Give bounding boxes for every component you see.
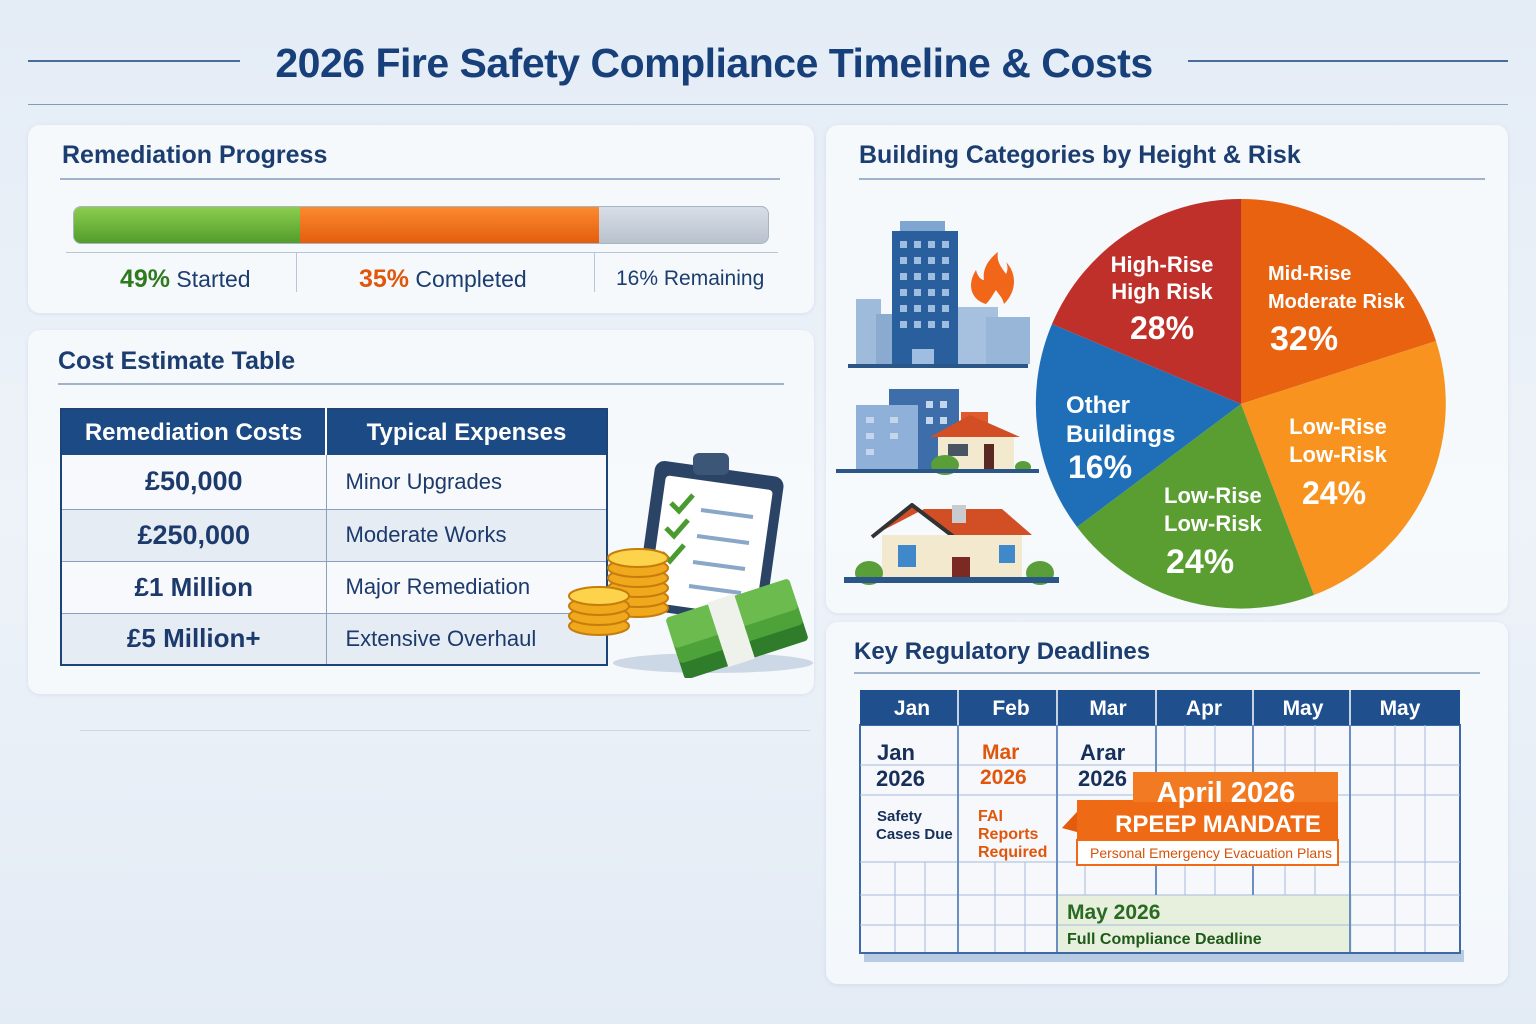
calendar: Reports bbox=[978, 826, 1039, 843]
callout: april 2026 rpeep mandate: April 2026 bbox=[1157, 777, 1295, 809]
icon: clipboard with coins and cash bbox=[568, 453, 813, 678]
calendar bbox=[859, 690, 1464, 962]
callout: april 2026 rpeep mandate bbox=[1062, 772, 1338, 865]
calendar: Safety bbox=[877, 808, 922, 825]
cost table: £5 Million+ bbox=[127, 623, 261, 653]
pie label: low-rise bottom: Low-Risk bbox=[1164, 511, 1263, 536]
calendar: Apr bbox=[1186, 697, 1222, 720]
pie label: mid-rise: 32% bbox=[1270, 320, 1338, 358]
heading: deadlines: Key Regulatory Deadlines bbox=[854, 638, 1150, 665]
calendar: Jan bbox=[877, 740, 915, 765]
calendar: May 2026 bbox=[1067, 901, 1160, 924]
cost table: Extensive Overhaul bbox=[346, 626, 536, 651]
calendar: 2026 bbox=[1078, 766, 1127, 791]
label: 35% completed: 35% Completed bbox=[359, 265, 527, 293]
pie label: mid-rise: Mid-Rise bbox=[1268, 263, 1351, 285]
calendar: Full Compliance Deadline bbox=[1067, 931, 1262, 948]
title: 2026 Fire Safety Compliance Timeline & Costs bbox=[275, 40, 1153, 86]
pie label: high-rise: High-Rise bbox=[1111, 252, 1213, 277]
calendar: Required bbox=[978, 844, 1047, 861]
pie label: high-rise: High Risk bbox=[1111, 279, 1213, 304]
icon: high-rise building with fire bbox=[848, 221, 1030, 368]
pie label: other: Buildings bbox=[1066, 421, 1175, 448]
calendar: FAI bbox=[978, 808, 1003, 825]
label: 49% started: 49% Started bbox=[120, 265, 251, 293]
heading: building categories: Building Categories by Height & Risk bbox=[859, 141, 1301, 169]
calendar: 2026 bbox=[980, 766, 1027, 789]
panel: remediation progress bbox=[28, 125, 814, 313]
pie label: other: 16% bbox=[1068, 449, 1132, 485]
panel: key regulatory deadlines bbox=[826, 622, 1508, 984]
icon: house bbox=[844, 503, 1059, 585]
label: 16% remaining: 16% Remaining bbox=[616, 267, 764, 290]
cost table: Major Remediation bbox=[346, 574, 530, 599]
calendar: Jan bbox=[894, 697, 930, 720]
callout: april 2026 rpeep mandate: RPEEP MANDATE bbox=[1115, 811, 1321, 838]
cost table: Remediation Costs bbox=[85, 418, 302, 446]
progress bar bbox=[73, 206, 769, 244]
calendar: Arar bbox=[1080, 740, 1125, 765]
cost table: £50,000 bbox=[145, 466, 243, 496]
cost table bbox=[60, 408, 608, 666]
pie label: other: Other bbox=[1066, 392, 1130, 419]
pie label: low-rise bottom: 24% bbox=[1166, 543, 1234, 581]
pie label: mid-rise: Moderate Risk bbox=[1268, 291, 1406, 313]
panel: building categories bbox=[826, 125, 1508, 613]
pie label: high-rise: 28% bbox=[1130, 310, 1194, 346]
calendar: May bbox=[1380, 697, 1421, 720]
calendar: Feb bbox=[992, 697, 1030, 720]
cost table: Typical Expenses bbox=[367, 418, 566, 446]
calendar: Cases Due bbox=[876, 826, 953, 843]
callout: april 2026 rpeep mandate: Personal Emergency Evacuation Plans bbox=[1090, 845, 1332, 861]
heading: cost estimate table: Cost Estimate Table bbox=[58, 347, 295, 375]
calendar: May bbox=[1283, 697, 1324, 720]
heading: remediation progress: Remediation Progress bbox=[62, 141, 327, 169]
cost table: Moderate Works bbox=[346, 522, 506, 547]
pie label: low-rise bottom: Low-Rise bbox=[1164, 483, 1262, 508]
pie label: low-rise right: Low-Risk bbox=[1289, 442, 1388, 467]
pie chart bbox=[1036, 199, 1446, 609]
icon: mid-rise buildings with house bbox=[836, 389, 1039, 475]
pie label: low-rise right: 24% bbox=[1302, 475, 1366, 511]
calendar: 2026 bbox=[876, 766, 925, 791]
calendar: Mar bbox=[1089, 697, 1127, 720]
pie label: low-rise right: Low-Rise bbox=[1289, 414, 1387, 439]
panel: cost estimate table bbox=[28, 330, 814, 694]
cost table: £1 Million bbox=[135, 572, 253, 602]
cost table: £250,000 bbox=[137, 520, 250, 550]
calendar: Mar bbox=[982, 741, 1019, 764]
cost table: Minor Upgrades bbox=[346, 469, 502, 494]
